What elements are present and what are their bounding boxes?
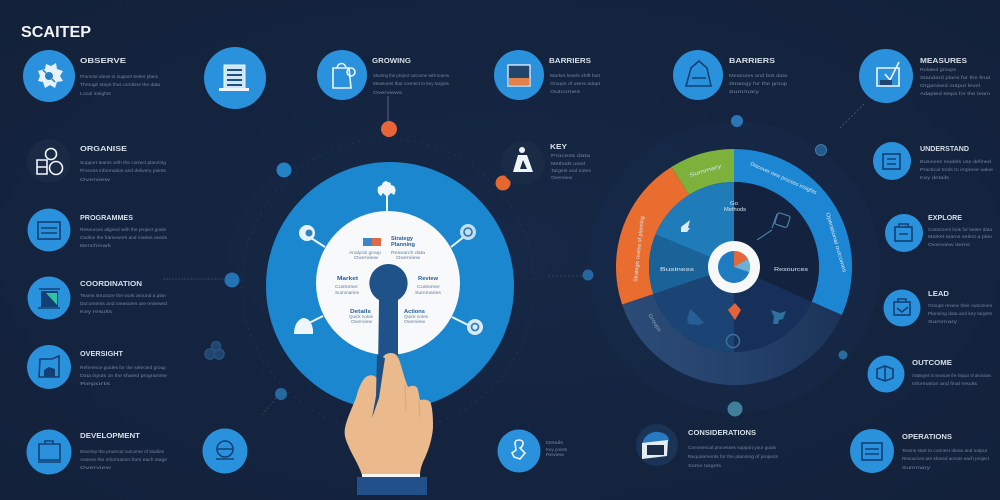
hub label: top left: Analysis group [349,250,382,255]
ring label: blue arc: Discover new process insights [749,161,818,196]
item: left column cluster: Process information and delivery points [80,168,167,173]
hub label: lower right [404,309,429,324]
item: left column cluster [27,139,167,183]
spoke icon: lower left [294,318,313,334]
item: left column cluster: Overview [80,177,111,182]
hand [345,353,433,495]
item: left column case: DEVELOPMENT [80,431,140,440]
sector: bottom left [653,267,734,352]
item: left column green chart: Teams structure the work around a plan [80,293,166,298]
item: right column 2: Overview items [928,242,971,247]
hub label: top right: Strategy [391,236,413,242]
donut chart [616,149,852,385]
hub label: left: Summaries [335,290,360,295]
item: left column folder: OVERSIGHT [80,349,123,358]
item: right column 1: Key details [920,175,950,180]
item: left column green chart [28,276,167,320]
node: lower left blue [262,388,287,415]
item: left column screen: PROGRAMMES [80,213,133,222]
item: left column case: Develop the practical outcome of studies [80,449,165,454]
ring: blue [734,149,852,315]
item: left column case [26,430,167,474]
item: bottom center [498,430,568,472]
hub label: left [335,276,360,295]
keyhole pointer [369,264,408,371]
item: top right-center: Summary [729,89,760,94]
ring: dark [622,294,842,385]
item: right column 4: OUTCOME [912,358,952,367]
sector icon: bird [687,309,704,325]
item: bottom left globe [202,428,248,474]
item: top center-right browser: Market levels shift fast [550,73,601,78]
item: right column 5: Teams start to connect ideas and output [902,448,988,453]
hub label: top right [391,236,426,260]
item: bottom center: Details [546,440,564,445]
node: upper left blue [276,162,292,178]
item: left column case: Assess the information from each stage [80,457,167,462]
spoke icon: upper left [299,225,315,241]
hub label: top left: Overview [354,255,379,260]
hub label: top left [349,238,382,260]
item: bottom center: Review [546,452,565,457]
sector icon: arrow [681,220,690,232]
item: bottom center-right: Requirements for the planning of projects [688,454,779,459]
hub label: top right: Research data [391,250,426,255]
sector label: left: Business [660,267,694,273]
item: right column 1: UNDERSTAND [920,144,970,153]
item: top center map: Measures that connect to key targets [373,81,450,86]
sector: left [649,234,734,294]
item: top center map: GROWING [372,56,411,65]
white hub [316,211,460,355]
item: top right: Adapted steps for the team [920,91,990,96]
item: right column 5: OPERATIONS [902,432,952,441]
item: top left gear: Promote ideas to support better plans [80,74,159,79]
hub label: lower left: Details [350,309,371,315]
item: left column folder: Data inputs on the shared programme [80,373,167,378]
item: top right: Standard plans for the final [920,75,990,80]
item: right column 2: Customers look for better data [928,227,992,232]
item: bottom center-right: Some targets [688,463,722,468]
item: top center-right browser [494,50,601,100]
item: top center-right browser: Groups of users adapt [550,81,601,86]
item: right column 3 [884,289,993,326]
node: top of donut [731,115,743,127]
node: ring marker [816,144,826,156]
item: bottom center: Key points [546,447,568,452]
item: bottom center-right: Commercial processes support your goals [688,445,777,450]
ring label: green: Summary [689,163,723,179]
connector node: left blue [163,272,240,288]
item: left column green chart: Key results [80,309,113,314]
orange node near center [496,176,510,190]
sector icon: device [757,212,791,240]
item: left column case: Overview [80,465,112,470]
item: center dark emblem [501,141,592,185]
item: right column 1: Business models use defined [920,159,992,164]
item: right column 5: Summary [902,465,931,470]
hub label: lower left [349,309,374,324]
node: teal bottom [728,402,742,416]
hub label: lower left: Quick notes [349,314,374,319]
sector icon: diamond [728,303,741,320]
spoke icon: upper right [460,224,476,240]
sector: bottom right [734,267,812,352]
item: left column screen: Resources aligned with the project goals [80,227,167,232]
item: center dark emblem: Methods used [551,161,586,166]
item: top left gear [23,50,160,102]
sector icon: ring [726,334,740,348]
item: right column 1: Practical tools to improve value [920,167,994,172]
item: left column cluster: ORGANISE [80,144,127,153]
item: center dark emblem: Targets and notes [551,168,592,173]
item: top left gear: Through steps that combine the data [80,82,160,87]
ring label: orange: Strategic review of planning [633,216,646,282]
sector label: top: Go [730,201,738,207]
hub label: top right: Planning [391,242,415,248]
item: top right-center: Strategy for the group [729,81,788,86]
title: SCAITEP [21,24,91,41]
hub label: right: Customer [417,284,441,289]
cuff [357,477,427,495]
hub label: left: Market [337,276,358,282]
item: top right: MEASURES [920,56,967,65]
sector label: top: Methods [724,207,746,213]
item: top center map [317,50,450,100]
sector: top right [734,182,819,302]
connector and orange node [381,96,397,137]
hub label: right: Review [418,276,439,282]
item: left column green chart: Documents and measures are reviewed [80,301,167,306]
sector label: top [724,201,746,213]
item: left column screen: Outline the framework and market needs [80,235,168,240]
item: right column 2: Market teams select a plan [928,234,993,239]
item: top dashboard icon [204,47,266,109]
sector icon: shape [771,310,786,324]
hub label: lower right: Overview [404,319,426,324]
node: left of donut [548,270,594,280]
item: right column 5: Resources are shared across each project [902,456,990,461]
hub label: right [415,276,442,295]
item: bottom center-right [636,424,779,468]
hub label: lower left: Overview [351,319,373,324]
item: top right-center [673,50,788,100]
ring label: dark: Groups [646,313,662,333]
item: right column 4: Information and final results [912,381,978,386]
item: top center map: Sharing the project outcome with teams [373,73,450,78]
item: top right-center: Measures and fast data [729,73,788,78]
item: top center-right browser: Outcomes [550,89,581,94]
item: center dark emblem: Overview [551,175,573,180]
item: right column 3: Planning data and key targets [928,311,993,316]
item: left column screen: Benchmark [80,243,112,248]
hub label: lower right: Actions [404,309,425,315]
item: left column green chart: COORDINATION [80,279,142,288]
item: top left gear: Local insights [80,91,112,96]
item: bottom center-right: CONSIDERATIONS [688,428,756,437]
item: right column 1 [840,103,994,180]
spoke icon: top [378,181,396,196]
item: right column 3: Groups review their outcomes [928,303,993,308]
item: right column 2: EXPLORE [928,213,962,222]
item: top right: Organised output level [920,83,980,88]
item: left column cluster: Support teams with the correct planning [80,160,166,165]
item: right column 2 [885,213,993,252]
hub label: right: Summaries [415,290,442,295]
hub label: lower right: Quick notes [404,314,429,319]
ring label: blue side: Operational outcomes [824,212,847,273]
hub label: top right: Overview [396,255,421,260]
item: top right-center: BARRIERS [729,56,775,65]
central blue wheel [266,162,514,410]
sector label: right: Resources [774,267,808,273]
ring: green [672,149,734,195]
item: left column folder [27,345,167,389]
sector: top left [656,182,734,267]
item: top right [859,49,990,103]
item: left column screen [28,208,168,252]
item: top center-right browser: BARRIERS [549,56,591,65]
item: center dark emblem: Process data [551,153,591,158]
faint cluster icon [205,342,224,359]
item: right column 4 [868,356,992,392]
hub [708,241,760,293]
item: right column 3: Summary [928,319,958,324]
item: right column 3: LEAD [928,289,950,298]
item: top right: Related groups [920,67,957,72]
ring: orange [616,167,689,305]
item: right column 5 [850,429,990,473]
item: left column folder: Reports [80,381,111,386]
spokes [309,196,470,326]
item: center dark emblem: KEY [550,142,567,151]
hub label: left: Customer [335,284,359,289]
node: lower right of donut [838,350,848,360]
item: top left gear: OBSERVE [80,56,126,65]
item: top center map: Overviews [373,90,403,95]
spoke icon: lower right [467,319,483,335]
item: left column folder: Reference guides for the selected group [80,365,166,370]
